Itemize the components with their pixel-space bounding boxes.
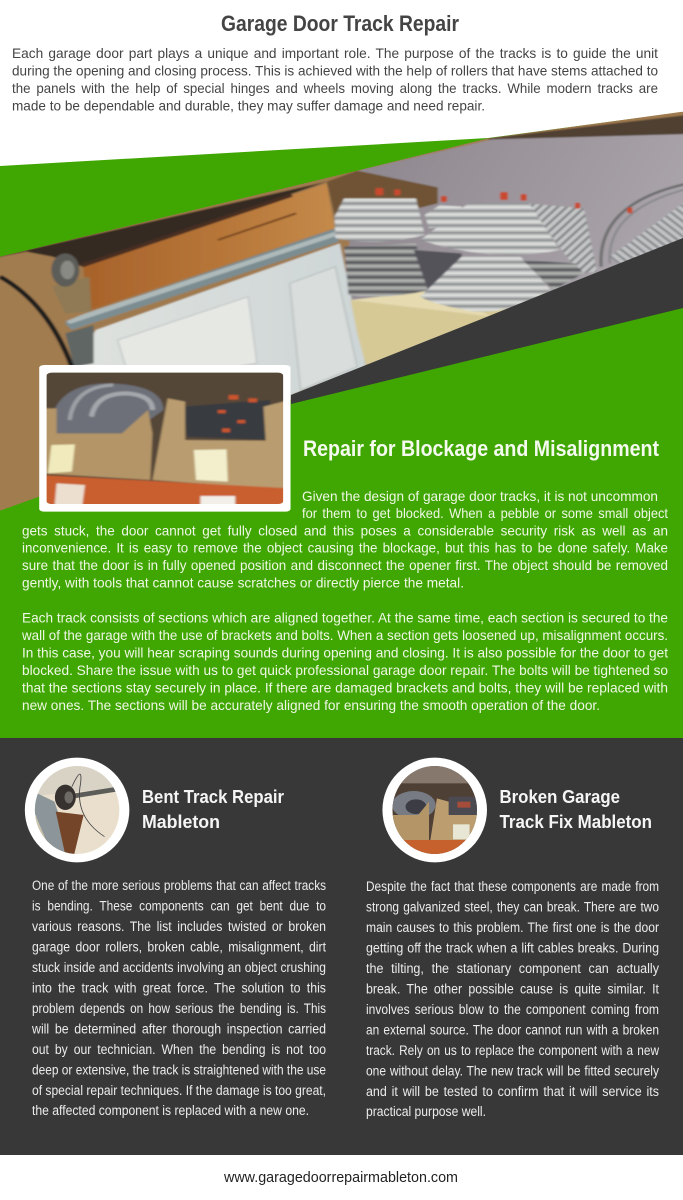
icon: broken track circular photo	[382, 758, 487, 862]
inset photo: boxes of cables	[39, 365, 291, 512]
text block: bent track: will be determined after thorough inspection carried	[31, 1022, 326, 1036]
intro text block	[12, 45, 658, 114]
green body text: misalignment: that the sections stay securely in place. If there are damaged brackets and bolts, they will be replaced with	[22, 680, 668, 696]
text block: bent track: problem depends on how serious the bending is. This	[32, 1001, 326, 1016]
green body text: misalignment: blocked. Share the issue with us to get quick professional garage door repair. The bolts will be tightened so	[22, 662, 668, 678]
green body text: misalignment: In this case, you will hear scraping sounds during opening and closing. It is also possible for the door to get	[22, 644, 668, 660]
green body text: misalignment: new ones. The sections will be accurately aligned for ensuring the smooth operation of the door.	[22, 697, 600, 713]
text block: bent track: out by our technician. When the bending is not too	[32, 1042, 326, 1057]
text block: bent track: One of the more serious problems that can affect tracks	[32, 878, 326, 893]
heading: broken garage track fix: Broken Garage	[500, 786, 620, 807]
panel: dark section	[0, 738, 683, 1155]
text block: bent track: stuck inside and accidents involving an object crushing	[32, 960, 326, 975]
text block: bent track: into the track with great force. The solution to this	[32, 980, 326, 996]
text block: broken track	[366, 879, 659, 1119]
text block: broken track: and it will be tested to confirm that it will service its	[366, 1084, 659, 1099]
green body text: blockage: sure that the door is in fully opened position and disconnect the opener first. The object should be removed	[22, 557, 668, 573]
green body text: blockage: gently, with tools that cannot cause scratches or directly pierce the metal.	[22, 574, 464, 590]
text block: bent track: garage door rollers, broken cable, misalignment, dirt	[32, 940, 326, 954]
green body text: blockage	[22, 488, 668, 590]
text block: broken track: break. The other possible cause is quite similar. It	[366, 982, 659, 996]
text block: broken track: the tilting, the stationary component can actually	[366, 961, 659, 976]
text block: broken track: practical purpose well.	[366, 1104, 486, 1119]
green body text: blockage: inconvenience. It is easy to remove the object causing the blockage, but this has to be done safely. Make	[22, 540, 668, 556]
text block: broken track: getting off the track when a lift cables breaks. During	[366, 940, 659, 956]
text block: bent track: the affected component is replaced with a new one.	[32, 1103, 309, 1118]
title: Garage Door Track Repair	[221, 11, 459, 36]
heading: broken garage track fix	[500, 786, 652, 832]
intro text block: the panels with the help of special hinges and wheels moving along the tracks. While modern tracks are	[12, 80, 658, 96]
text block: broken track: involves serious blow to the component coming from	[366, 1002, 659, 1017]
green body text: misalignment	[21, 610, 668, 713]
heading: bent track repair: Bent Track Repair	[142, 786, 284, 807]
intro text block: made to be dependable and durable, they may suffer damage and need repair.	[12, 98, 485, 114]
text block: bent track: of special repair techniques. If the damage is too great,	[32, 1083, 326, 1098]
panel: green section	[0, 112, 683, 738]
text block: bent track: various reasons. The list includes twisted or broken	[32, 919, 326, 934]
green body text: blockage: Given the design of garage door tracks, it is not uncommon	[302, 488, 658, 504]
intro text block: during the opening and closing process. This is achieved with the help of rollers that have stems attached to	[12, 62, 658, 78]
heading: bent track repair: Mableton	[142, 811, 220, 832]
green body text: blockage: gets stuck, the door cannot get fully closed and this poses a considerable security risk as well as an	[22, 522, 668, 538]
green body text: misalignment: Each track consists of sections which are aligned together. At the same time, each section is secured to the	[22, 610, 668, 626]
text block: bent track: deep or extensive, the track is straightened with the use	[32, 1062, 326, 1078]
icon: bent track circular photo	[24, 758, 130, 862]
text block: bent track	[31, 878, 326, 1118]
green body text: misalignment: wall of the garage with the use of brackets and bolts. When a section gets loosened up, misalignment occurs.	[21, 627, 668, 643]
text block: bent track: is bending. These components can get bent due to	[32, 898, 326, 914]
heading: broken garage track fix: Track Fix Mableton	[500, 811, 652, 832]
heading: bent track repair	[142, 786, 284, 832]
footer website: www.garagedoorrepairmableton.com	[223, 1169, 458, 1186]
hero photo collage	[0, 112, 683, 510]
text block: broken track: main causes to this problem. The first one is the door	[366, 920, 659, 935]
dark diagonal band	[291, 238, 683, 404]
text block: broken track: one without delay. The new track will be fitted securely	[366, 1064, 659, 1078]
intro text block: Each garage door part plays a unique and important role. The purpose of the tracks is to guide the unit	[12, 45, 658, 61]
